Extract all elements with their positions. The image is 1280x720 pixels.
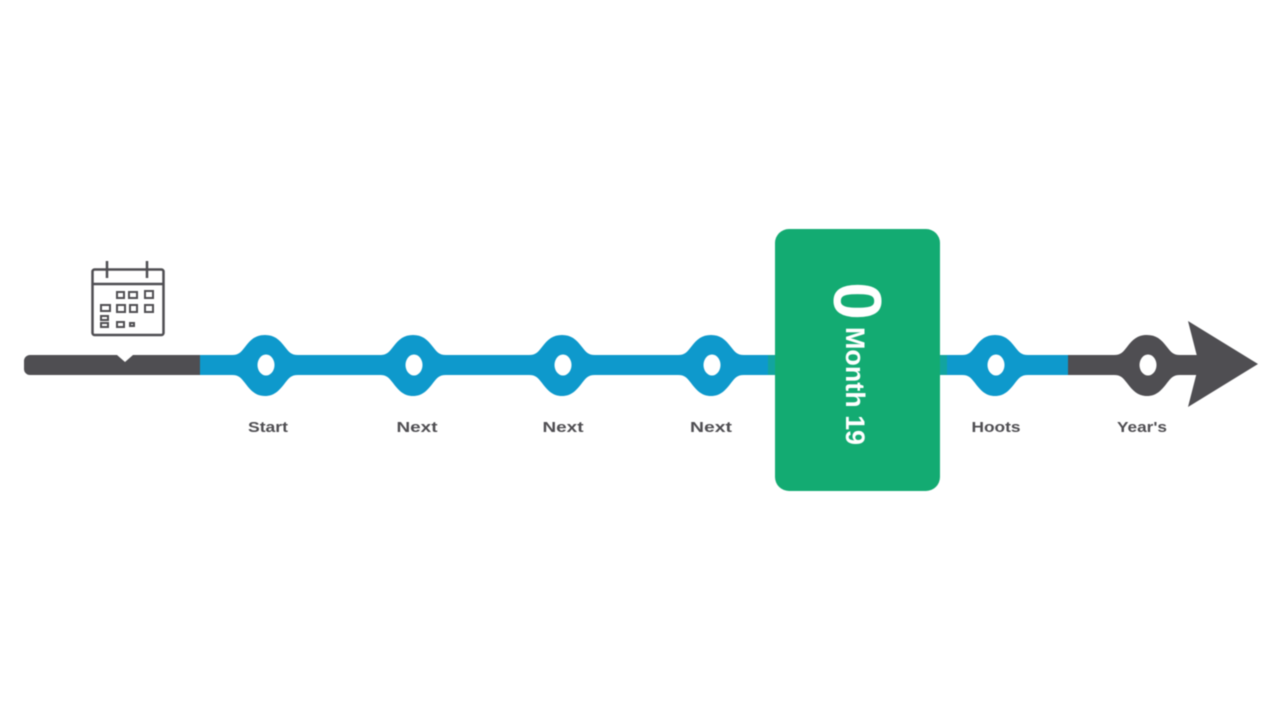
node 4 (678, 335, 744, 396)
icon: calendar (92, 261, 164, 335)
node 2 (380, 335, 446, 396)
card caption: Month 19 (840, 327, 870, 445)
label: node 6: Year's (1117, 419, 1167, 436)
node 1 (232, 335, 298, 396)
timeline blue bar left (200, 355, 772, 375)
label: node 4: Next (690, 419, 732, 436)
node 5 (962, 335, 1028, 396)
panel: green milestone card (768, 229, 947, 491)
arrowhead (1188, 321, 1258, 407)
node 6 (1114, 335, 1180, 396)
timeline end bar (1068, 355, 1202, 375)
label: start: Start (248, 419, 288, 436)
label: node 5: Hoots (972, 419, 1020, 436)
label: node 2: Next (396, 419, 438, 436)
timeline blue bar right (938, 355, 1069, 375)
node 3 (529, 335, 595, 396)
milestone labels (248, 419, 1167, 436)
label: node 3: Next (542, 419, 584, 436)
timeline start bar (24, 355, 201, 375)
big number: 0 (819, 282, 895, 320)
